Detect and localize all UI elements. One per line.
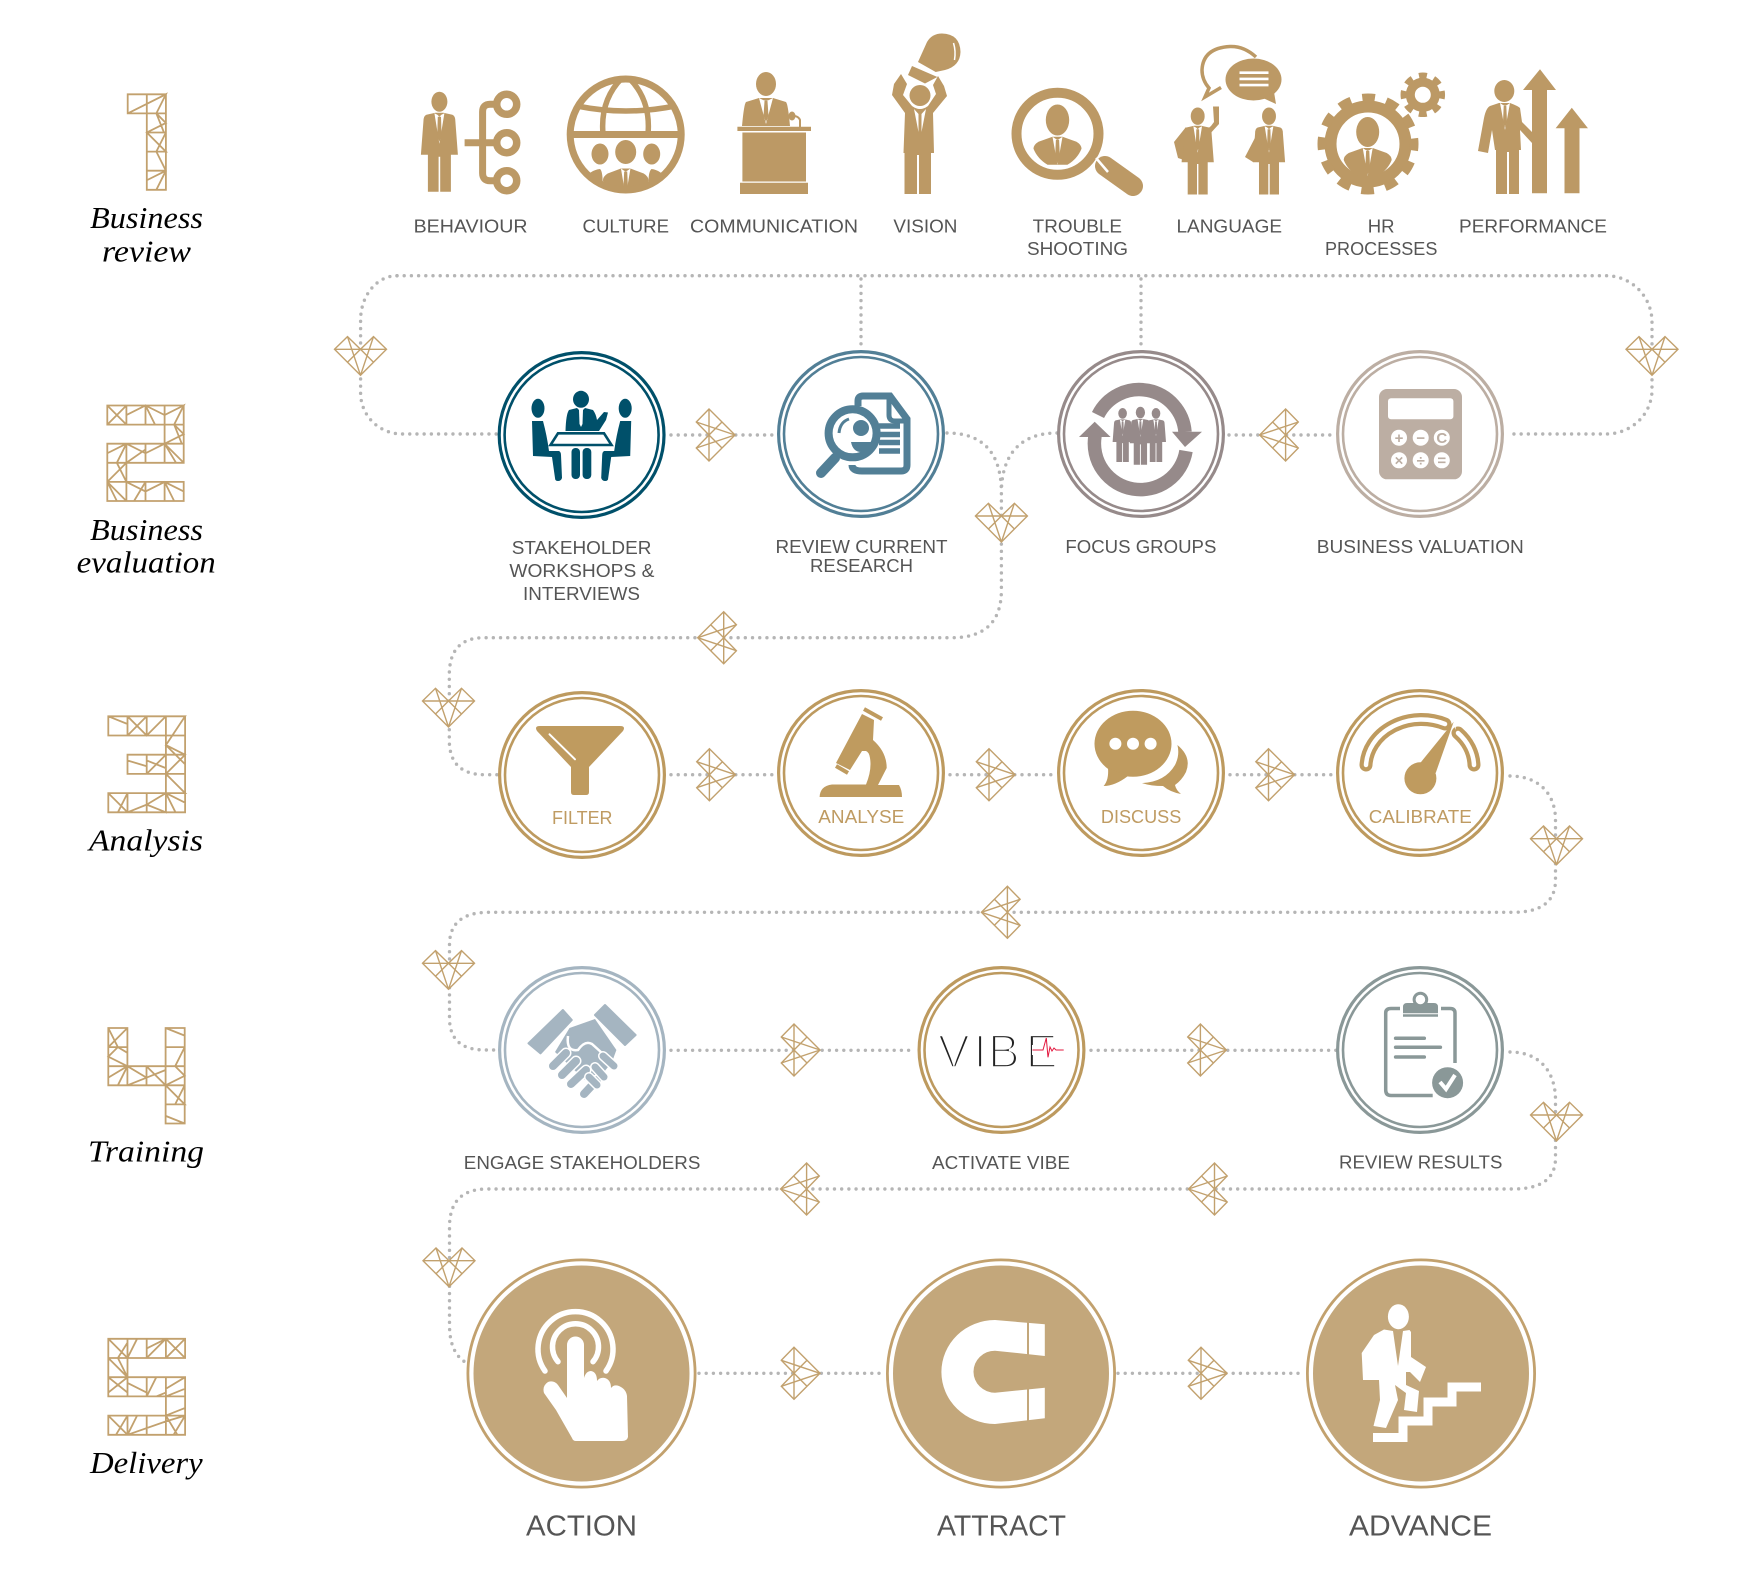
step 5 numeral bbox=[108, 1339, 185, 1435]
panel: business valuation: C bbox=[1436, 430, 1447, 447]
step 1 numeral bbox=[128, 94, 166, 190]
arrow marker route to filter bbox=[698, 612, 736, 664]
label: analyse: ANALYSE bbox=[818, 806, 904, 827]
arrow marker route left bbox=[781, 1163, 819, 1215]
label: discuss: DISCUSS bbox=[1101, 806, 1181, 827]
label: filter: FILTER bbox=[552, 807, 612, 828]
arrow marker route right bbox=[1188, 1163, 1227, 1215]
label: trouble shooting bbox=[1027, 215, 1128, 259]
panel: activate vibe bbox=[919, 968, 1084, 1132]
label: vision: VISION bbox=[893, 215, 957, 236]
label: advance: ADVANCE bbox=[1349, 1511, 1492, 1543]
step 4 title: Training: Training bbox=[88, 1134, 204, 1169]
panel: engage stakeholders bbox=[500, 968, 664, 1132]
arrow marker route to engage bbox=[981, 886, 1020, 938]
step 2 title: Business evaluation: evaluation bbox=[77, 545, 216, 580]
panel: analyse bbox=[779, 691, 943, 855]
dotted route: training to delivery bbox=[450, 1050, 1556, 1373]
panel: stakeholder workshops bbox=[499, 353, 664, 517]
icon: trouble shooting magnifier bbox=[1016, 93, 1133, 186]
label: stakeholder workshops: WORKSHOPS & bbox=[509, 560, 655, 581]
label: culture: CULTURE bbox=[582, 215, 669, 236]
label: stakeholder workshops: STAKEHOLDER bbox=[512, 537, 651, 558]
label: behaviour: BEHAVIOUR bbox=[414, 215, 528, 236]
arrow marker engage to vibe bbox=[781, 1024, 820, 1076]
arrow marker stakeholder to review bbox=[696, 409, 735, 461]
label: review current research bbox=[776, 536, 948, 576]
icon: communication lectern bbox=[737, 72, 811, 194]
dotted route: business review to evaluation bbox=[361, 276, 1652, 434]
label: engage stakeholders: ENGAGE STAKEHOLDERS bbox=[464, 1152, 700, 1173]
step 1 title: Business review: Business bbox=[90, 200, 203, 235]
icon: performance bbox=[1478, 69, 1588, 194]
heart marker row 4 left bbox=[422, 951, 474, 989]
arrow marker analyse to discuss bbox=[976, 749, 1015, 801]
label: HR processes: HR bbox=[1368, 215, 1394, 236]
label: review current research: REVIEW CURRENT bbox=[776, 536, 948, 557]
label: stakeholder workshops: INTERVIEWS bbox=[523, 583, 640, 604]
panel: business valuation: = bbox=[1437, 452, 1446, 470]
label: HR processes: PROCESSES bbox=[1325, 238, 1437, 259]
label: HR processes bbox=[1325, 215, 1437, 259]
panel: filter bbox=[500, 693, 664, 857]
heart marker right top bbox=[1626, 337, 1678, 375]
heart marker row 3 right bbox=[1530, 826, 1582, 865]
label: calibrate: CALIBRATE bbox=[1369, 806, 1472, 827]
icon: culture globe bbox=[568, 78, 684, 198]
heart marker left top bbox=[334, 337, 386, 375]
arrow marker attract to advance bbox=[1188, 1347, 1227, 1399]
panel: review results bbox=[1338, 968, 1502, 1132]
panel: action bbox=[468, 1260, 695, 1487]
label: action: ACTION bbox=[526, 1511, 637, 1543]
panel: focus groups bbox=[1059, 352, 1223, 516]
label: language: LANGUAGE bbox=[1176, 215, 1282, 236]
step 2 title: Business evaluation: Business bbox=[90, 512, 203, 547]
icon: language speakers bbox=[1174, 46, 1285, 195]
arrow marker action to attract bbox=[781, 1347, 820, 1399]
heart marker row 4 right bbox=[1530, 1102, 1582, 1141]
panel: business valuation bbox=[1338, 352, 1502, 516]
arrow marker vibe to review results bbox=[1188, 1024, 1226, 1076]
step 3 numeral bbox=[108, 716, 185, 812]
label: trouble shooting: SHOOTING bbox=[1027, 238, 1128, 259]
heart marker centre bbox=[975, 503, 1027, 542]
icon: HR gears bbox=[1322, 75, 1442, 190]
label: review current research: RESEARCH bbox=[810, 555, 913, 576]
step 1 title: Business review bbox=[90, 200, 203, 268]
label: performance: PERFORMANCE bbox=[1459, 215, 1607, 236]
dotted route: analysis to training bbox=[450, 775, 1556, 1050]
icon: vision person holding bulb bbox=[892, 34, 960, 194]
step 2 numeral bbox=[107, 406, 184, 501]
panel: advance bbox=[1307, 1260, 1535, 1487]
heart marker row 3 left bbox=[422, 688, 474, 727]
step 1 title: Business review: review bbox=[102, 234, 191, 268]
panel: business valuation: + bbox=[1395, 430, 1404, 447]
label: communication: COMMUNICATION bbox=[690, 215, 858, 236]
panel: attract bbox=[887, 1260, 1115, 1487]
label: trouble shooting: TROUBLE bbox=[1033, 215, 1122, 236]
label: stakeholder workshops bbox=[509, 537, 655, 604]
step 5 title: Delivery: Delivery bbox=[89, 1445, 203, 1480]
label: focus groups: FOCUS GROUPS bbox=[1065, 536, 1216, 557]
label: review results: REVIEW RESULTS bbox=[1339, 1152, 1502, 1172]
panel: discuss bbox=[1059, 691, 1223, 855]
arrow marker focus to valuation bbox=[1260, 409, 1298, 461]
icon: behaviour bbox=[421, 92, 517, 192]
panel: activate vibe: VIBE bbox=[938, 1025, 1057, 1078]
step 2 title: Business evaluation bbox=[77, 512, 216, 580]
arrow marker filter to analyse bbox=[697, 749, 735, 801]
panel: review current research bbox=[779, 352, 943, 516]
panel: business valuation: × bbox=[1395, 452, 1404, 470]
panel: calibrate bbox=[1338, 691, 1502, 855]
step 3 title: Analysis: Analysis bbox=[87, 822, 203, 858]
label: attract: ATTRACT bbox=[937, 1511, 1066, 1543]
panel: business valuation: − bbox=[1416, 430, 1425, 447]
label: activate vibe: ACTIVATE VIBE bbox=[932, 1152, 1070, 1173]
arrow marker discuss to calibrate bbox=[1256, 749, 1294, 801]
step 4 numeral bbox=[108, 1028, 185, 1124]
panel: business valuation: ÷ bbox=[1417, 452, 1425, 470]
heart marker row 5 left bbox=[423, 1248, 475, 1287]
dotted route: evaluation to analysis bbox=[449, 433, 1333, 775]
label: business valuation: BUSINESS VALUATION bbox=[1317, 536, 1524, 557]
